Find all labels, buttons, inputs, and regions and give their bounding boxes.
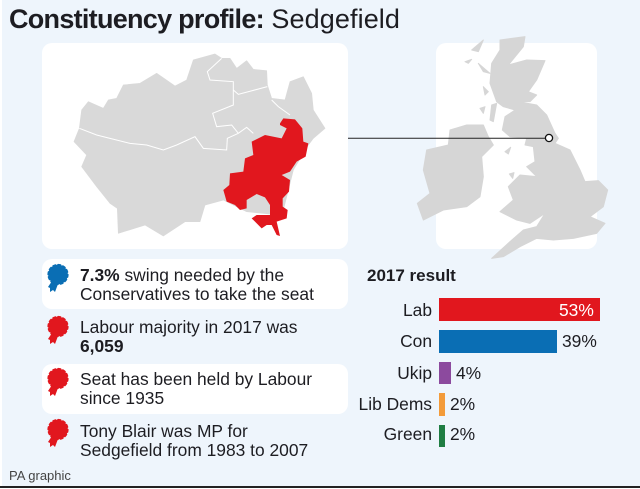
map: County Durham with Sedgefield highlighted — [74, 54, 326, 236]
source credit: PA graphic — [9, 468, 71, 483]
row: Lab: 53% — [559, 300, 594, 320]
panel: bullet 1 background — [42, 259, 348, 309]
text: Labour majority — [80, 317, 298, 356]
bar chart: 2017 result — [359, 298, 600, 447]
text: seat held by Labour — [80, 369, 312, 408]
icon: red rosette — [47, 368, 69, 396]
icon: blue rosette — [47, 264, 69, 292]
row: Ukip: 4% — [456, 363, 481, 383]
row: Lib Dems: 2% — [450, 394, 475, 414]
chart heading: 2017 result — [367, 266, 456, 285]
text: Labour majority: 6,059 — [80, 336, 124, 356]
bottom margin — [0, 488, 640, 489]
row: Con: Con — [400, 331, 432, 351]
text: Tony Blair — [80, 421, 308, 460]
map: Britain and Ireland locator — [416, 36, 608, 259]
leader line and location marker — [348, 134, 554, 142]
left page margin — [0, 0, 2, 489]
panel: bullet 3 background — [42, 364, 348, 414]
text: swing needed: 7.3% swing needed by the — [80, 265, 284, 285]
row: Con — [400, 330, 597, 353]
row: Con: 39% — [562, 331, 597, 351]
text: Tony Blair: Tony Blair was MP for — [80, 421, 248, 441]
text: Labour majority: Labour majority in 2017 was — [80, 317, 298, 337]
row: Green: Green — [384, 424, 432, 444]
panel: UK map background — [436, 43, 597, 249]
row: Ukip: Ukip — [397, 363, 432, 383]
icon: red rosette — [47, 418, 69, 447]
row: Green — [384, 424, 475, 447]
text: seat held by Labour: Seat has been held by Labour — [80, 369, 312, 389]
row: Green: 2% — [450, 424, 475, 444]
text: seat held by Labour: since 1935 — [80, 388, 164, 408]
row: Lib Dems: Lib Dems — [359, 394, 432, 414]
title: Constituency profile: Sedgefield — [9, 4, 400, 34]
icon: red rosette — [47, 316, 69, 344]
row: Ukip — [397, 362, 481, 384]
bottom rule — [0, 486, 640, 488]
panel: constituency map — [42, 43, 348, 249]
row: Lib Dems — [359, 393, 475, 416]
text: swing needed — [80, 265, 314, 304]
row: Lab: Lab — [403, 300, 432, 320]
text: Tony Blair: Sedgefield from 1983 to 2007 — [80, 440, 308, 460]
text: swing needed: Conservatives to take the seat — [80, 284, 314, 304]
row: Lab — [403, 298, 600, 321]
